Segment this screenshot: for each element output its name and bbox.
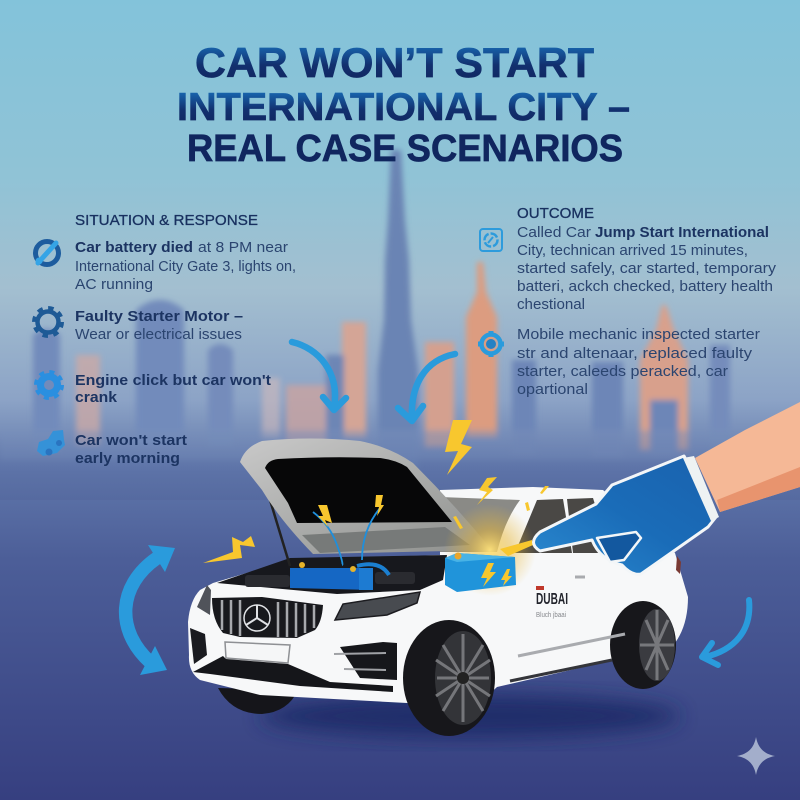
blurred city skyline [0, 150, 800, 470]
grille [212, 597, 323, 638]
arm [695, 402, 800, 512]
car [188, 438, 688, 736]
title: REAL CASE SCENARIOS [187, 128, 623, 170]
tail light [676, 556, 681, 574]
left vent [190, 628, 207, 664]
front wheel [403, 620, 495, 736]
text: jump start outcome: chestional [517, 296, 585, 313]
text: mobile mechanic outcome: starter, caleeds peracked, car [517, 363, 728, 380]
hood strut [267, 490, 290, 566]
licence plate [225, 642, 290, 663]
engine battery [290, 562, 389, 590]
icon: blue car [37, 430, 65, 456]
text: battery died: Car battery died [75, 239, 193, 256]
text: jump start outcome: batteri, ackch checked, battery health [517, 278, 773, 295]
door logo: DUBAI [536, 591, 568, 608]
text: jump start outcome: Called Car [517, 224, 591, 241]
arrow: rear curved [702, 600, 749, 665]
foreground battery [445, 552, 516, 592]
icon: wrench in ring [36, 242, 58, 264]
engine bay [217, 555, 447, 594]
panel: outcome [478, 205, 777, 398]
title [177, 39, 630, 170]
car shadow [260, 694, 680, 738]
text: car won't start: Car won't start [75, 432, 187, 449]
lightning bolts [203, 420, 549, 563]
heading: situation and response: SITUATION & RESPONSE [75, 212, 258, 229]
jumper wires [313, 508, 380, 565]
side windows [515, 498, 610, 553]
text: jump start outcome: Jump Start International [595, 224, 769, 241]
text: mobile mechanic outcome: opartional [517, 381, 588, 398]
text: jump start outcome [517, 224, 777, 313]
car body [188, 487, 688, 712]
door logo [536, 586, 568, 619]
text: battery died: at 8 PM near [198, 239, 288, 256]
mercedes star [244, 605, 270, 631]
right vent [334, 642, 397, 680]
arm shadow [717, 467, 800, 512]
arrow: double curved [126, 545, 175, 675]
panel: situation and response [34, 212, 296, 467]
windshield [440, 497, 520, 552]
text: faulty starter motor: Faulty Starter Motor – [75, 308, 243, 325]
icon: target [478, 331, 504, 357]
right headlight [335, 592, 420, 620]
text: car won't start [75, 432, 187, 467]
title: INTERNATIONAL CITY – [177, 86, 630, 129]
text: faulty starter motor [75, 308, 243, 343]
text: mobile mechanic outcome: str and altenaar, replaced faulty [517, 345, 753, 362]
left headlight [197, 585, 211, 615]
text: car won't start: early morning [75, 450, 180, 467]
arrow: thin curved left [292, 342, 346, 410]
engine parts [245, 572, 415, 587]
heading: outcome: OUTCOME [517, 205, 594, 222]
text: engine click [75, 372, 271, 406]
icon: blue gear [36, 372, 62, 398]
open hood [240, 438, 492, 554]
title: CAR WON’T START [195, 39, 594, 86]
text: mobile mechanic outcome: Mobile mechanic inspected starter [517, 326, 760, 343]
text: battery died: AC running [75, 276, 153, 293]
rear wheel [610, 601, 676, 689]
spark glow [444, 504, 536, 596]
text: battery died: International City Gate 3, lights on, [75, 258, 296, 275]
lower air intake [193, 656, 393, 692]
gloved hand pointing [534, 402, 800, 574]
icon: square repair badge [480, 229, 502, 251]
arrow: thin curved right [398, 354, 455, 421]
door logo: Bluch jbaai [536, 612, 566, 619]
glove cuff [683, 456, 719, 521]
door handle and trim [510, 577, 625, 681]
glove [534, 456, 716, 574]
text: jump start outcome: City, technican arrived 15 minutes, [517, 242, 748, 259]
icon: dark gear [34, 308, 62, 336]
text: jump start outcome: started safely, car started, temporary [517, 260, 777, 277]
text: engine click: crank [75, 389, 118, 406]
palm fold [597, 532, 641, 562]
text: battery died [75, 239, 296, 293]
text: mobile mechanic outcome [517, 326, 760, 398]
text: engine click: Engine click but car won't [75, 372, 271, 389]
text: faulty starter motor: Wear or electrical issues [75, 326, 242, 343]
far front wheel [218, 688, 298, 714]
sparkle mark [737, 737, 775, 775]
